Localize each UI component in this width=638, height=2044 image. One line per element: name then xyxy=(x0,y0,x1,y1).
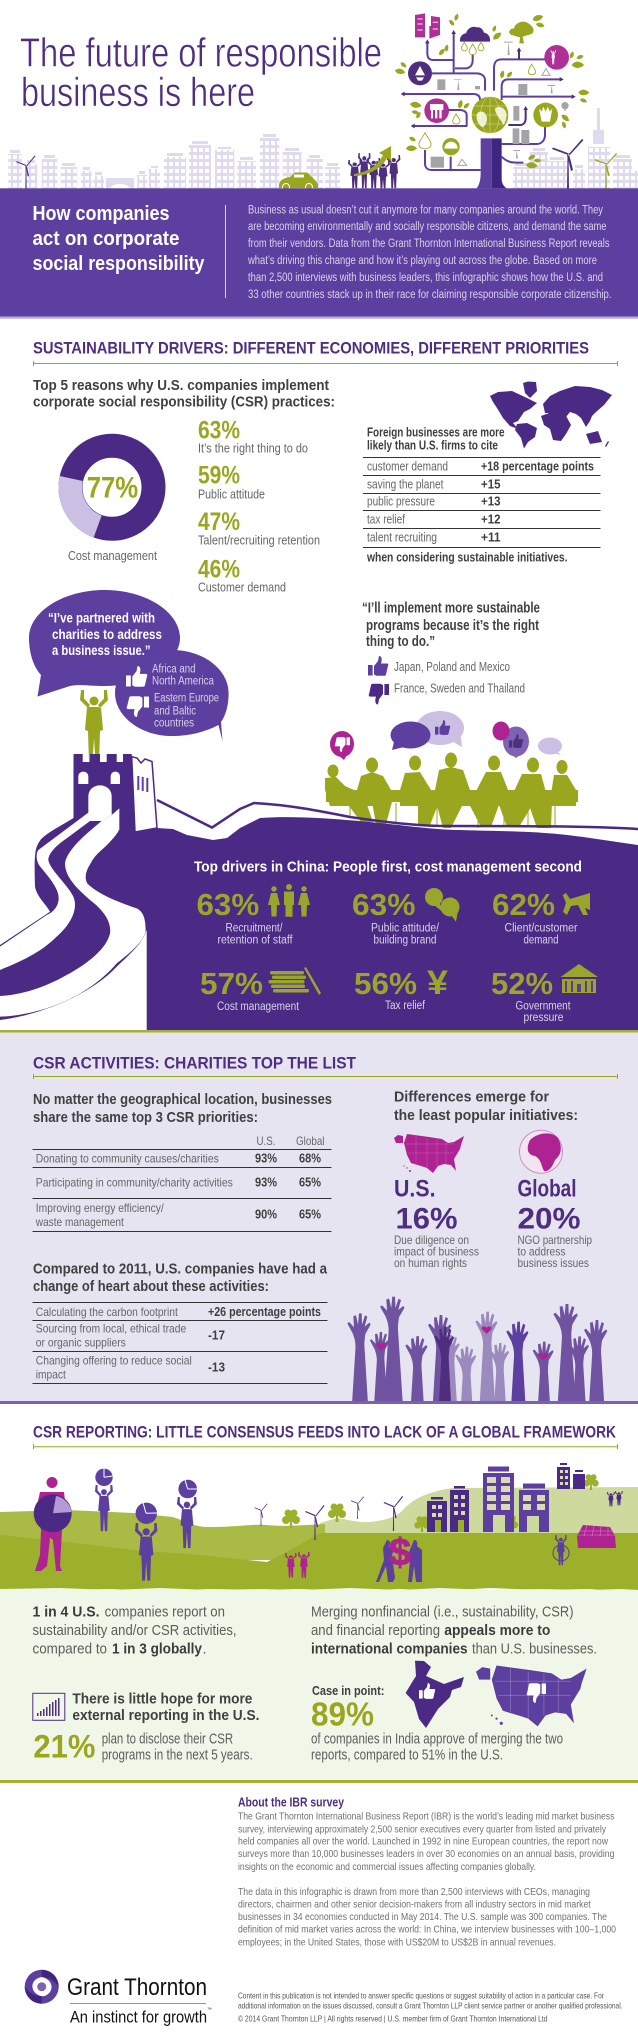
subheading: top 3 priorities xyxy=(33,1091,332,1126)
icon: person with pie 1 xyxy=(95,1468,113,1531)
table: change of heart: +26 percentage points xyxy=(208,1305,321,1319)
subheading: top 3 priorities: share the same top 3 CSR priorities: xyxy=(33,1109,258,1126)
callout: partnered with charities xyxy=(29,590,229,741)
table: change of heart: -17 xyxy=(208,1328,225,1342)
text: disclaimer: © 2014 Grant Thornton LLP | All rights reserved | U.S. member firm of Grant Thornton International Ltd xyxy=(238,2014,548,2024)
stat labels: building brand xyxy=(374,934,436,946)
quote: implement more sustainable programs: thing to do.” xyxy=(366,633,435,650)
text: about the IBR survey xyxy=(238,1796,616,1948)
circles xyxy=(408,61,432,85)
intro heading: act on corporate xyxy=(32,227,180,250)
subheading: change of heart: change of heart about these activities: xyxy=(33,1278,269,1295)
icon: government building xyxy=(561,964,598,993)
subheading: change of heart: Compared to 2011, U.S. companies have had a xyxy=(33,1260,328,1277)
table: change of heart: Sourcing from local, ethical trade xyxy=(36,1322,187,1336)
icon: thumb up xyxy=(368,656,388,676)
branches xyxy=(404,33,573,170)
quote: implement more sustainable programs: programs because it’s the right xyxy=(366,617,539,634)
icon: thumb up xyxy=(126,666,147,687)
table: change of heart xyxy=(32,1302,328,1384)
table: priorities: waste management xyxy=(35,1215,124,1229)
subheading: top 3 priorities: No matter the geographical location, businesses xyxy=(33,1091,332,1108)
stat labels: Public attitude/ xyxy=(371,923,440,935)
stat labels: demand xyxy=(524,934,558,946)
tree xyxy=(509,22,534,43)
table: foreign businesses: +12 xyxy=(481,513,501,527)
icon: yen: ¥ xyxy=(427,964,448,1002)
stat labels: Recruitment/ xyxy=(226,923,283,935)
stat values xyxy=(196,887,555,1001)
building xyxy=(415,13,440,39)
leaves xyxy=(395,13,589,169)
subheading: top 5 reasons xyxy=(33,377,335,411)
China heading: Top drivers in China: People first, cost management second xyxy=(194,859,582,876)
table: priorities: 68% xyxy=(299,1152,321,1166)
stat: Global 20%: to address xyxy=(518,1244,566,1258)
text: 1 in 4: sustainability and/or CSR activities, xyxy=(32,1622,236,1639)
illustration: sustainability tree xyxy=(395,13,589,188)
text: 1 in 4 xyxy=(32,1604,236,1657)
callout: partnered with charities: countries xyxy=(154,718,194,730)
title: The future of responsible xyxy=(20,30,382,76)
table: priorities: Global xyxy=(296,1134,324,1148)
arches xyxy=(88,785,112,814)
icon: person with hoop xyxy=(553,1535,569,1565)
text: little hope xyxy=(72,1690,259,1724)
section heading: sustainability drivers xyxy=(33,338,618,366)
text: 1 in 4: compared to xyxy=(32,1640,107,1657)
illustration: meeting people xyxy=(325,752,578,828)
stat: U.S. 16%: Due diligence on xyxy=(394,1233,469,1247)
icon: purple wind turbine xyxy=(552,139,584,189)
stat list: reasons: 63% xyxy=(198,417,240,445)
intro paragraph xyxy=(247,204,612,301)
stat values: 63% xyxy=(196,887,259,922)
icon: coins xyxy=(268,967,321,995)
stat labels: pressure xyxy=(524,1012,564,1024)
icon: megaphone xyxy=(563,893,590,915)
icon: crowd with rising arrow xyxy=(348,146,400,188)
chart: donut 77%: 77% xyxy=(87,472,138,505)
logo: Grant Thornton: Grant Thornton xyxy=(67,1974,207,2001)
icon: people xyxy=(268,884,310,917)
chart: donut 77% xyxy=(58,446,157,563)
stat: case in point 89% xyxy=(311,1683,563,1763)
icon: children playing xyxy=(285,1552,310,1578)
section heading: CSR reporting xyxy=(33,1422,618,1449)
table intro xyxy=(367,426,505,452)
text: merging reporting: and financial reporting xyxy=(311,1622,440,1639)
stat: Global 20% xyxy=(518,1176,592,1270)
text: 1 in 4: 1 in 3 globally xyxy=(112,1640,203,1657)
table: priorities: 65% xyxy=(299,1176,321,1190)
icon: U.S. map with thumb down xyxy=(476,1666,587,1726)
callout: partnered with charities: charities to address xyxy=(52,627,162,642)
icon: olive wind turbine xyxy=(594,153,617,189)
stat values: 57% xyxy=(200,966,263,1001)
icon: India map with thumb up xyxy=(406,1661,464,1728)
table: foreign businesses: +13 xyxy=(481,495,501,509)
subheading: least popular: the least popular initiatives: xyxy=(394,1107,578,1124)
city skyline xyxy=(8,108,638,189)
stat labels: Tax relief xyxy=(385,1000,426,1012)
illustration: meeting bubbles xyxy=(330,711,562,760)
text: little hope: There is little hope for more xyxy=(72,1690,252,1707)
icon: world map xyxy=(490,382,612,448)
callout: partnered with charities: a business issue.” xyxy=(52,643,150,658)
divider xyxy=(0,1030,638,1032)
text: about the IBR survey: About the IBR survey xyxy=(238,1796,344,1810)
table: priorities: Donating to community causes/charities xyxy=(36,1152,219,1166)
table intro: likely than U.S. firms to cite xyxy=(367,438,498,452)
table: foreign businesses: +11 xyxy=(481,531,501,545)
quote: implement more sustainable programs xyxy=(362,600,540,704)
stat: Global 20%: NGO partnership xyxy=(518,1233,592,1247)
table: foreign businesses: public pressure xyxy=(367,495,435,509)
table: foreign businesses: when considering sustainable initiatives. xyxy=(366,551,568,565)
stat list: reasons: 46% xyxy=(198,555,240,583)
text: 1 in 4: companies report on xyxy=(105,1604,225,1621)
icon: person with pie 2 xyxy=(135,1502,157,1581)
icon: pink man with pie xyxy=(34,1477,72,1571)
text: merging reporting: Merging nonfinancial (i.e., sustainability, CSR) xyxy=(311,1604,574,1621)
stat: 21%: 21% xyxy=(33,1729,95,1765)
table: change of heart: -13 xyxy=(208,1360,225,1374)
trunk xyxy=(477,138,492,188)
stat list: reasons xyxy=(198,417,320,595)
stat labels: Client/customer xyxy=(504,923,578,935)
stat labels: Cost management xyxy=(217,1001,300,1013)
logo: Grant Thornton: An instinct for growth xyxy=(70,2008,207,2027)
wall mass xyxy=(0,754,638,1030)
icon: buildings xyxy=(427,1463,585,1532)
title xyxy=(20,30,382,115)
table: foreign businesses: customer demand xyxy=(367,460,448,474)
panel: top drivers in China xyxy=(194,859,598,1024)
callout: partnered with charities: and Baltic xyxy=(154,705,196,717)
subheading: least popular: Differences emerge for xyxy=(394,1089,549,1106)
icon: person with pie 3 xyxy=(177,1480,197,1548)
quote: implement more sustainable programs: France, Sweden and Thailand xyxy=(394,682,525,696)
drops xyxy=(419,42,536,149)
icon: globe xyxy=(520,1130,562,1173)
table: change of heart: or organic suppliers xyxy=(36,1336,126,1350)
icon: barn xyxy=(577,1525,616,1548)
text: 1 in 4: . xyxy=(202,1640,207,1657)
stat list: reasons: It’s the right thing to do xyxy=(198,442,308,456)
table: priorities: Improving energy efficiency/ xyxy=(36,1201,164,1215)
small grey icons xyxy=(431,41,569,168)
table: priorities: U.S. xyxy=(256,1134,276,1148)
intro heading xyxy=(32,202,205,275)
panel: intro band xyxy=(0,188,638,319)
stat list: reasons: Customer demand xyxy=(198,581,286,595)
table: foreign businesses: tax relief xyxy=(367,513,405,527)
stat: 21% xyxy=(33,1729,253,1765)
icon: small people xyxy=(607,1491,623,1506)
table: foreign businesses xyxy=(363,426,600,565)
icon: bar chart box xyxy=(33,1693,65,1720)
stat list: reasons: Public attitude xyxy=(198,487,265,501)
table: priorities: 90% xyxy=(255,1208,277,1222)
icon: thumb down xyxy=(127,696,149,717)
intro heading: How companies xyxy=(32,202,170,225)
title: business is here xyxy=(21,69,255,115)
callout: partnered with charities: North America xyxy=(152,676,215,688)
table: foreign businesses: +15 xyxy=(481,478,501,492)
stat: Global 20%: business issues xyxy=(518,1256,589,1270)
road stripe 1 xyxy=(0,813,112,970)
arrowheads xyxy=(401,30,576,128)
stat values: 56% xyxy=(354,966,417,1001)
stat labels xyxy=(217,923,578,1024)
logo: Grant Thornton: ™ xyxy=(207,2007,212,2013)
stat values: 63% xyxy=(352,887,416,922)
subheading: change of heart xyxy=(33,1260,328,1295)
stat list: reasons: 47% xyxy=(198,508,240,536)
label: Cost management xyxy=(68,549,157,563)
table: priorities: Participating in community/charity activities xyxy=(36,1176,233,1190)
stat values: 62% xyxy=(492,887,555,922)
globe xyxy=(472,97,508,133)
illustration: raised hands xyxy=(347,1296,608,1401)
panel: landscape xyxy=(0,1463,638,1783)
text: merging reporting xyxy=(311,1604,597,1657)
stat values: 52% xyxy=(491,966,553,1001)
text: 1 in 4: 1 in 4 U.S. xyxy=(32,1604,100,1621)
stat list: reasons: Talent/recruiting retention xyxy=(198,533,320,547)
subheading: top 5 reasons: corporate social responsibility (CSR) practices: xyxy=(33,394,335,411)
table: priorities xyxy=(32,1134,332,1232)
text: merging reporting: international companies xyxy=(311,1640,468,1657)
section heading: CSR ACTIVITIES: CHARITIES TOP THE LIST xyxy=(33,1053,357,1072)
stat: 21%: plan to disclose their CSR xyxy=(102,1730,233,1747)
section heading xyxy=(33,1053,618,1079)
text: merging reporting: appeals more to xyxy=(444,1622,550,1639)
table intro: Foreign businesses are more xyxy=(367,426,505,440)
quote: implement more sustainable programs: “I’ll implement more sustainable xyxy=(362,600,540,617)
icon: U.S. map xyxy=(394,1134,464,1173)
text: disclaimer xyxy=(238,1990,622,2024)
stat: U.S. 16%: on human rights xyxy=(394,1256,467,1270)
icon: man on tower xyxy=(80,690,108,762)
quote: implement more sustainable programs: Japan, Poland and Mexico xyxy=(394,660,510,674)
subheading: top 5 reasons: Top 5 reasons why U.S. companies implement xyxy=(33,377,329,394)
divider xyxy=(0,1780,638,1783)
text: about the IBR survey: employees; in the United States, those with US$20M to US$2B in annual revenues. xyxy=(238,1936,556,1948)
stat: case in point 89%: of companies in India approve of merging the two xyxy=(311,1730,563,1747)
table: priorities: 65% xyxy=(299,1208,321,1222)
road stripe 2 xyxy=(0,808,146,1017)
table: foreign businesses: talent recruiting xyxy=(367,531,437,545)
icon: speech bubbles xyxy=(425,888,460,922)
intro heading: social responsibility xyxy=(32,252,205,275)
table: priorities: 93% xyxy=(255,1176,277,1190)
table: change of heart: Calculating the carbon footprint xyxy=(36,1305,178,1319)
stat: U.S. 16%: 16% xyxy=(396,1202,458,1235)
stat: Global 20%: 20% xyxy=(518,1202,580,1235)
callout: partnered with charities: “I’ve partnered with xyxy=(48,611,155,626)
stat labels: Government xyxy=(516,1000,571,1012)
stat: Global 20%: Global xyxy=(518,1176,576,1203)
table: change of heart: impact xyxy=(36,1368,66,1382)
table: foreign businesses: saving the planet xyxy=(367,478,444,492)
stat: case in point 89%: 89% xyxy=(311,1696,374,1733)
stat: U.S. 16%: U.S. xyxy=(394,1176,436,1203)
stat: case in point 89%: Case in point: xyxy=(312,1683,384,1698)
text: little hope: external reporting in the U.S. xyxy=(72,1707,259,1724)
icon: wind turbine left xyxy=(16,156,36,188)
stat list: reasons: 59% xyxy=(198,461,240,489)
table: change of heart: Changing offering to reduce social xyxy=(36,1354,192,1368)
logo: Grant Thornton xyxy=(25,1970,212,2027)
stat: U.S. 16%: impact of business xyxy=(394,1244,479,1258)
icon: taxi xyxy=(279,172,318,190)
icon: thumb down xyxy=(369,684,389,704)
table: foreign businesses: +18 percentage points xyxy=(481,460,594,474)
stat: 21%: programs in the next 5 years. xyxy=(102,1746,253,1763)
icon: couple with dollar sign: $ xyxy=(389,1532,411,1574)
text: merging reporting: than U.S. businesses. xyxy=(472,1640,597,1657)
panel: CSR activities xyxy=(0,1032,638,1404)
stat: case in point 89%: reports, compared to 51% in the U.S. xyxy=(311,1746,503,1763)
stat labels: retention of staff xyxy=(218,934,293,946)
callout: partnered with charities: Africa and xyxy=(152,664,196,676)
panel background xyxy=(0,1588,638,1780)
cloud xyxy=(460,27,490,42)
wind turbines and trees xyxy=(254,1474,599,1540)
table: priorities: 93% xyxy=(255,1152,277,1166)
tower side xyxy=(132,757,157,832)
text: about the IBR survey: insights on the economic and commercial issues affecting companies globally. xyxy=(238,1861,536,1873)
callout: partnered with charities: Eastern Europe xyxy=(154,693,219,705)
icon: couple with dollar sign xyxy=(376,1532,422,1582)
stat: U.S. 16% xyxy=(394,1176,479,1270)
illustration: great wall xyxy=(0,754,638,1030)
subheading: least popular xyxy=(394,1089,578,1124)
